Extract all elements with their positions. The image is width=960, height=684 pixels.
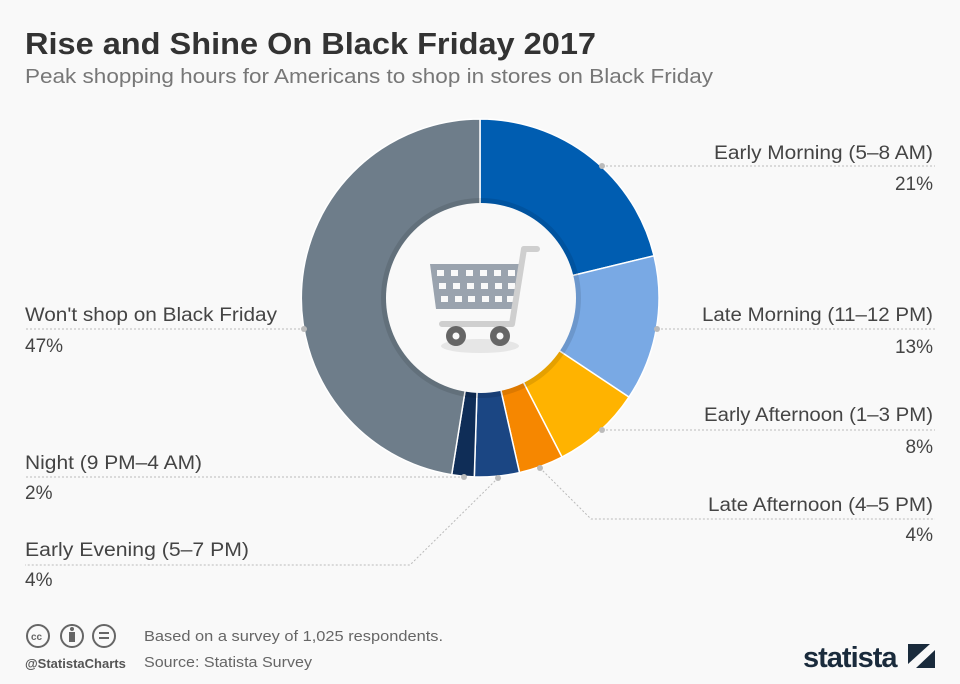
donut chart (301, 119, 659, 477)
icon: shopping cart (430, 249, 537, 353)
labels: 47% (25, 336, 63, 357)
labels: Early Afternoon (1–3 PM) (704, 405, 933, 426)
leader lines (25, 166, 935, 565)
text: cc (31, 632, 43, 643)
footer: license icons (27, 625, 115, 647)
labels: Won't shop on Black Friday (25, 305, 278, 326)
statista logo: statista (803, 642, 898, 674)
text: Source: Statista Survey (144, 654, 313, 671)
labels: 8% (906, 437, 933, 458)
labels: Early Morning (5–8 AM) (714, 143, 933, 164)
labels: Late Afternoon (4–5 PM) (708, 495, 933, 516)
subtitle: Peak shopping hours for Americans to shop in stores on Black Friday (25, 66, 713, 88)
labels: Early Evening (5–7 PM) (25, 540, 249, 561)
labels (25, 143, 933, 591)
center circle (381, 198, 581, 398)
labels: Late Morning (11–12 PM) (702, 305, 933, 326)
labels: 4% (25, 570, 53, 591)
footer handle: @StatistaCharts (25, 656, 126, 671)
footer source: Based on a survey of 1,025 respondents. (144, 628, 443, 645)
labels: 4% (906, 525, 933, 546)
labels: 21% (895, 174, 933, 195)
title: Rise and Shine On Black Friday 2017 (25, 26, 596, 61)
labels: 13% (895, 337, 933, 358)
labels: Night (9 PM–4 AM) (25, 453, 202, 474)
labels: 2% (25, 483, 53, 504)
